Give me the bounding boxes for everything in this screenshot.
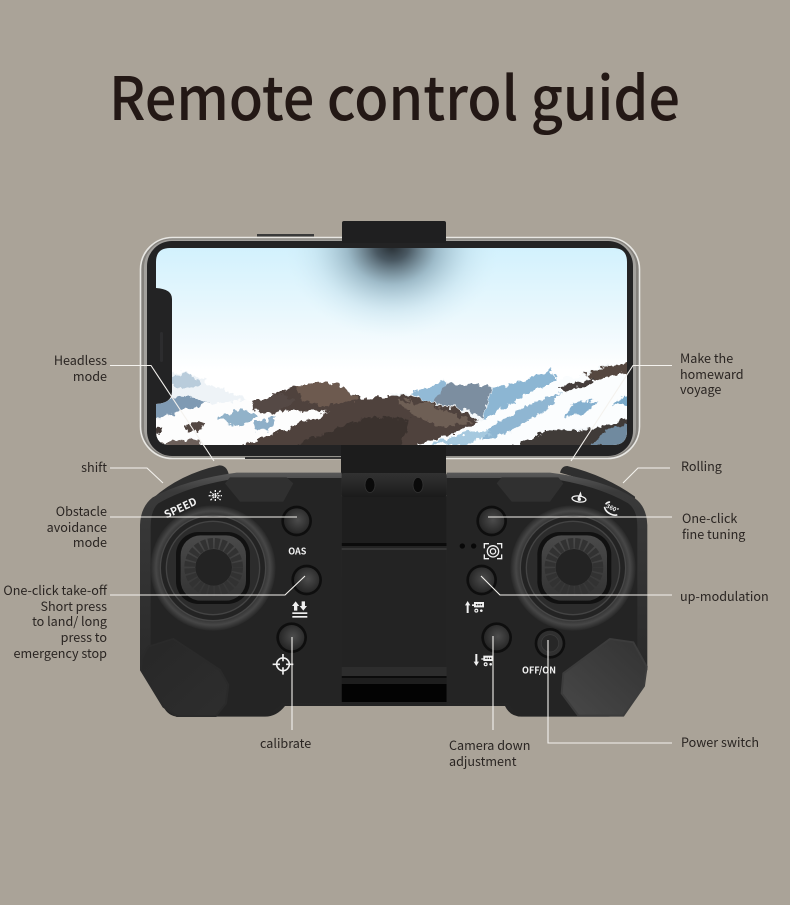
left body — [140, 473, 342, 717]
label: take-off and emergency stop: Short press — [40, 596, 107, 615]
left body inner face — [151, 478, 342, 713]
phone mounted in clamp — [140, 221, 640, 460]
fine tuning button — [476, 506, 507, 536]
icon: speed mode — [209, 490, 222, 502]
label: obstacle avoidance mode: avoidance — [47, 517, 107, 536]
label: up-modulation: up-modulation — [680, 586, 769, 605]
leader lines — [110, 366, 672, 743]
leader: shift — [110, 468, 163, 483]
right trigger recess — [497, 477, 563, 502]
label: rolling: Rolling — [681, 456, 722, 475]
clear phone case — [140, 238, 640, 458]
clamp neck — [341, 445, 446, 475]
label: headless mode: Headless — [54, 350, 107, 369]
icon: 360 roll: 360° — [605, 501, 621, 515]
title: Remote control guide — [109, 51, 680, 138]
icon: up and down arrows — [292, 601, 307, 618]
leader: up-modulation — [481, 576, 672, 595]
left thumb grip — [141, 639, 228, 716]
black slot — [341, 684, 447, 702]
right body inner face — [447, 478, 637, 713]
takeoff button — [291, 565, 322, 595]
phone metal rim — [144, 240, 636, 456]
label: make the homeward voyage: voyage — [680, 379, 721, 398]
label: calibrate: calibrate — [260, 733, 311, 752]
icon: camera down — [474, 654, 493, 666]
up modulation button — [466, 565, 497, 595]
power button — [535, 628, 565, 659]
leader: camera down — [492, 636, 494, 730]
speed label: SPEED — [162, 494, 200, 522]
label: make the homeward voyage: Make the — [680, 348, 733, 367]
earpiece — [160, 332, 163, 362]
left grip half — [140, 465, 342, 717]
mountains — [149, 363, 633, 449]
top clamp — [342, 221, 446, 243]
icon: camera up — [465, 601, 484, 613]
label: make the homeward voyage: homeward — [680, 364, 744, 383]
right shoulder button — [560, 466, 635, 503]
leader: headless mode — [110, 366, 214, 461]
hinge holes — [365, 478, 375, 492]
left shoulder button — [153, 465, 229, 498]
leader: obstacle avoidance — [110, 516, 297, 518]
OFF/ON label: OFF/ON — [522, 663, 556, 676]
calibrate button — [276, 622, 307, 653]
leader: calibrate — [291, 637, 293, 730]
icon: calibrate target — [273, 654, 293, 675]
leader: homeward voyage — [571, 366, 672, 461]
phone side button — [257, 234, 314, 236]
label: one-click fine tuning: One-click — [682, 508, 737, 527]
phone body — [147, 241, 633, 456]
hinge block — [341, 473, 447, 497]
leader: take-off — [110, 576, 305, 595]
icon: return home — [572, 491, 586, 503]
label: obstacle avoidance mode: mode — [73, 532, 107, 551]
left trigger recess — [225, 477, 293, 502]
leader: power switch — [548, 640, 672, 743]
label: one-click fine tuning: fine tuning — [682, 524, 745, 543]
right body — [447, 473, 647, 717]
leader: fine tuning — [488, 516, 672, 518]
right joystick — [510, 505, 636, 631]
label: obstacle avoidance mode: Obstacle — [56, 501, 107, 520]
leader: rolling — [623, 468, 670, 483]
icon: focus target — [484, 544, 502, 559]
right thumb grip — [562, 639, 647, 716]
controller — [140, 445, 647, 717]
label: take-off and emergency stop: One-click take-off — [3, 580, 108, 599]
label: take-off and emergency stop: emergency stop — [14, 643, 107, 662]
centre panel — [341, 496, 447, 706]
label: camera down adjustment: adjustment — [449, 751, 517, 770]
label: shift: shift — [81, 457, 107, 476]
OAS label: OAS — [288, 544, 307, 557]
infographic canvas — [4, 72, 768, 769]
label: camera down adjustment: Camera down — [449, 735, 530, 754]
label: take-off and emergency stop: to land/ long — [32, 611, 107, 630]
lower phone buttons — [245, 457, 345, 459]
left joystick — [150, 505, 276, 631]
camera down button — [481, 622, 512, 653]
indicator dots — [460, 543, 476, 549]
centre bracket — [341, 445, 447, 706]
label: power switch: Power switch — [681, 732, 759, 751]
label: take-off and emergency stop: press to — [61, 627, 107, 646]
label: headless mode: mode — [73, 366, 107, 385]
screen with mountain photo — [156, 248, 627, 445]
obstacle button — [281, 506, 312, 536]
right grip half — [447, 466, 647, 717]
